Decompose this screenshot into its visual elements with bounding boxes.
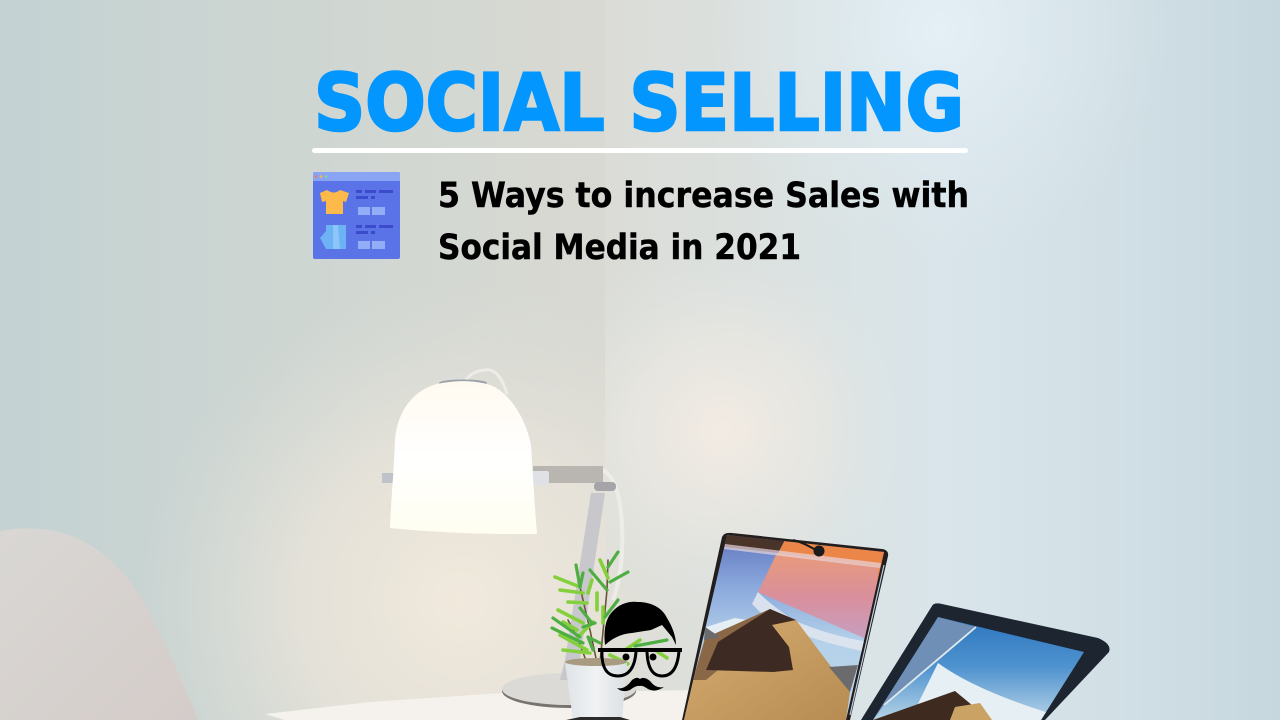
subtitle: Social Media in 2021 (438, 228, 801, 268)
clouds (706, 618, 746, 634)
plant (552, 552, 667, 664)
lamp shade (390, 381, 537, 534)
distant hills (829, 665, 858, 692)
lamp handle (466, 370, 507, 394)
dark corner (724, 535, 785, 553)
plant pot (565, 658, 630, 720)
clouds (910, 663, 1049, 720)
dune (873, 691, 972, 720)
laptop: back tablet (680, 530, 890, 720)
lamp cap (439, 380, 487, 386)
title underline (312, 148, 968, 153)
dune shadow (706, 609, 796, 672)
lamp arm (382, 466, 616, 491)
tablet edge highlight (850, 565, 884, 715)
mascot: cartoon face with glasses (598, 602, 682, 691)
subtitle: 5 Ways to increase Sales with (438, 176, 969, 216)
pink reflection (758, 553, 879, 640)
pale swoosh (752, 592, 869, 652)
lamp cable (603, 470, 622, 600)
desk (265, 690, 700, 720)
camera cable (793, 540, 819, 552)
laptop: front tablet (861, 603, 1110, 720)
t-shirt (320, 190, 349, 214)
chair (0, 528, 198, 720)
lamp base (502, 673, 636, 708)
desaturated reflection (873, 617, 976, 720)
title: SOCIAL SELLING (314, 59, 964, 149)
orange top strip (758, 540, 888, 640)
menu bar (724, 544, 881, 568)
icon: online shop catalogue (313, 172, 400, 259)
lamp (382, 370, 636, 708)
subtitle (438, 176, 969, 268)
shorts (320, 225, 346, 249)
mascot glasses (598, 650, 682, 676)
mascot hair (604, 602, 676, 645)
brown slope (693, 609, 772, 680)
lamp pole (560, 493, 605, 680)
camera dot (814, 546, 824, 556)
sand dune (684, 609, 850, 720)
mascot moustache (617, 678, 664, 691)
